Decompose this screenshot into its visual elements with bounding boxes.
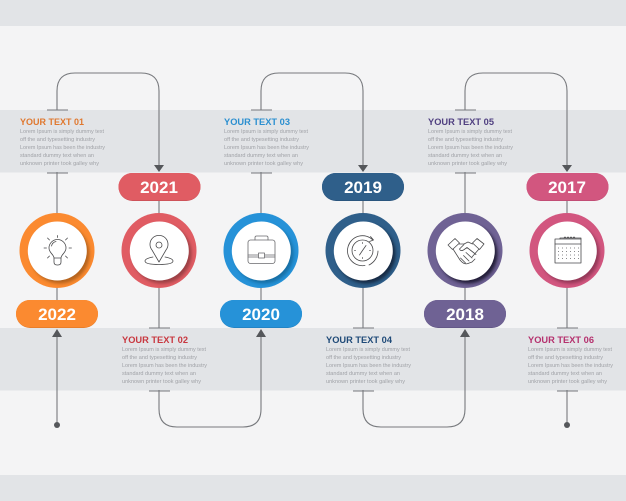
icon: calendar [555,237,581,263]
text block 01: off the and typesetting industry [20,137,95,143]
text block 05: off the and typesetting industry [428,137,503,143]
text block 06: Lorem Ipsum is simply dummy text [528,347,612,353]
text block 01 [20,117,105,167]
circle: handshake [428,213,502,288]
text block 02: Lorem Ipsum has been the industry [122,363,207,369]
year pill 2019 [322,173,404,201]
year pill 2022: 2022 [38,305,76,324]
text block 06 [528,335,613,385]
year pill 2020 [220,300,302,328]
text block 03: off the and typesetting industry [224,137,299,143]
year pill 2021: 2021 [140,178,178,197]
text block 04 [326,335,411,385]
text block 05 [428,117,513,167]
text block 02: YOUR TEXT 02 [122,335,188,346]
text block 04: Lorem Ipsum has been the industry [326,363,411,369]
text block 02: off the and typesetting industry [122,355,197,361]
circle: location pin [122,213,196,288]
circle: clock [326,213,400,288]
icon: lightbulb [44,236,72,265]
text block 02: unknown printer took galley why [122,379,201,385]
text block 03: unknown printer took galley why [224,161,303,167]
year pill 2017: 2017 [548,178,586,197]
icon: handshake [448,238,484,264]
text block 04: Lorem Ipsum is simply dummy text [326,347,410,353]
text block 01: YOUR TEXT 01 [20,117,85,128]
connector lines and arrows [47,73,578,428]
year pill 2021 [118,173,200,201]
text block 06: unknown printer took galley why [528,379,607,385]
text block 06: Lorem Ipsum has been the industry [528,363,613,369]
text block 03: standard dummy text when an [224,153,298,159]
text block 02: Lorem Ipsum is simply dummy text [122,347,206,353]
year pill 2017 [526,173,608,201]
year pill 2018: 2018 [446,305,484,324]
text block 05: Lorem Ipsum is simply dummy text [428,129,512,135]
circle: briefcase [224,213,298,288]
circle: lightbulb [20,213,94,288]
text block 04: YOUR TEXT 04 [326,335,393,346]
text block 04: standard dummy text when an [326,371,400,377]
text block 02 [122,335,207,385]
text block 04: off the and typesetting industry [326,355,401,361]
text block 03 [224,117,309,167]
text block 05: standard dummy text when an [428,153,502,159]
icon: location pin [145,235,173,264]
year pill 2020: 2020 [242,305,280,324]
year pill 2019: 2019 [344,178,382,197]
text block 06: YOUR TEXT 06 [528,335,594,346]
text block 01: standard dummy text when an [20,153,94,159]
text block 03: Lorem Ipsum has been the industry [224,145,309,151]
year pill 2022 [16,300,98,328]
icon: clock [347,236,378,266]
text block 01: Lorem Ipsum has been the industry [20,145,105,151]
text block 02: standard dummy text when an [122,371,196,377]
text block 06: standard dummy text when an [528,371,602,377]
text block 04: unknown printer took galley why [326,379,405,385]
text block 06: off the and typesetting industry [528,355,603,361]
text block 05: YOUR TEXT 05 [428,117,495,128]
text block 01: unknown printer took galley why [20,161,99,167]
year pill 2018 [424,300,506,328]
text block 05: Lorem Ipsum has been the industry [428,145,513,151]
text block 03: Lorem Ipsum is simply dummy text [224,129,308,135]
circle: calendar [530,213,604,288]
text block 05: unknown printer took galley why [428,161,507,167]
icon: briefcase [248,236,275,264]
text block 01: Lorem Ipsum is simply dummy text [20,129,104,135]
text block 03: YOUR TEXT 03 [224,117,290,128]
